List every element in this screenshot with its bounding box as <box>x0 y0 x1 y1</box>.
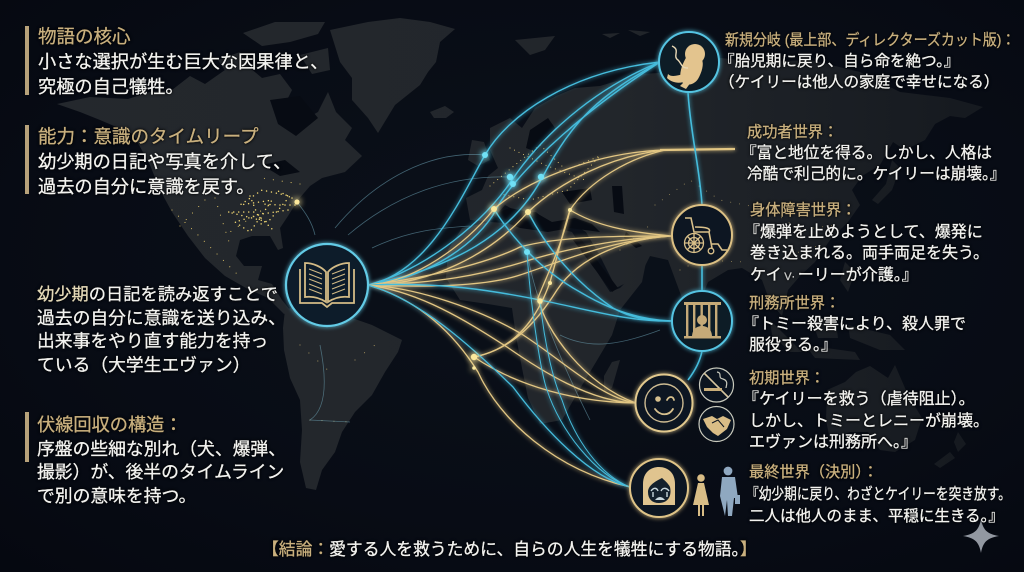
Hudson Bay <box>270 96 318 136</box>
text block: diary explanation: 幼少期の日記を読み返すことで <box>37 284 278 304</box>
UK and Ireland <box>468 140 490 166</box>
icon: fetus <box>659 32 719 92</box>
text block: disability world <box>744 201 989 284</box>
Red Sea <box>573 238 618 292</box>
text block: final world: 『幼少期に戻り、わざとケイリーを突き放す。 <box>746 486 1011 503</box>
text block: success world: 成功者世界： <box>747 124 838 141</box>
text block: diary explanation: ている（大学生エヴァン） <box>37 355 250 375</box>
conclusion: 【結論：愛する人を救うために、自らの人生を犠牲にする物語。】 <box>262 540 757 559</box>
text block: success world: 『富と地位を得る。しかし、人格は <box>741 145 992 162</box>
text block: initial world: 初期世界： <box>749 370 825 387</box>
text block: new branch world: 『胎児期に戻り、自ら命を絶つ。』 <box>719 53 959 70</box>
text block: foreshadowing: 序盤の些細な別れ（犬、爆弾、 <box>37 439 286 459</box>
text block: new branch world <box>719 32 1015 91</box>
text block: disability world: 巻き込まれる。両手両足を失う。 <box>750 245 989 262</box>
New Zealand <box>934 432 966 468</box>
icon: no smoking <box>700 368 734 402</box>
Caspian Sea <box>612 186 624 214</box>
text block: prison world <box>743 294 966 354</box>
Philippines and Taiwan <box>840 262 855 292</box>
Svalbard <box>515 36 555 55</box>
text block: ability: 能力：意識のタイムリープ <box>38 126 259 147</box>
gold lines to wheelchair node <box>368 210 672 357</box>
icon: handshake <box>699 406 734 442</box>
gold lines to success world <box>368 149 735 357</box>
text block: disability world: 『爆弾を止めようとして、爆発に <box>744 224 983 241</box>
icon: man with briefcase figure <box>720 467 740 516</box>
text block: foreshadowing: で別の意味を持つ。 <box>37 486 196 506</box>
central node: open book <box>286 244 368 326</box>
world map <box>57 18 983 490</box>
text block: initial world <box>743 370 989 451</box>
text block: initial world: エヴァンは刑務所へ。』 <box>749 434 917 451</box>
text block: final world: 最終世界（決別）： <box>749 464 878 481</box>
Canadian Arctic islands <box>218 22 330 74</box>
text block: disability world: V· <box>784 271 795 283</box>
text block: prison world: 刑務所世界： <box>749 295 840 312</box>
text block: ability <box>38 126 291 197</box>
text block: final world: 二人は他人のまま、平穏に生きる。』 <box>749 508 1004 525</box>
text block: disability world: ケイ ーリーが介護。』 <box>750 267 918 284</box>
vertical cyan connector between nodes <box>688 92 702 380</box>
Europe lights <box>490 145 600 200</box>
text block: foreshadowing: 撮影）が、後半のタイムライン <box>37 462 284 482</box>
Baltic Sea <box>526 118 555 152</box>
text block: final world <box>746 464 1011 525</box>
Eurasia <box>466 58 983 316</box>
gold lines to smile node <box>368 210 636 403</box>
text block: diary explanation: 出来事をやり直す能力を持っ <box>37 331 268 351</box>
Great Lakes <box>262 160 300 176</box>
Persian Gulf <box>624 232 642 248</box>
Greenland <box>330 18 455 133</box>
text block: foreshadowing: 伏線回収の構造： <box>37 415 183 435</box>
Mediterranean and Black Sea <box>490 188 600 232</box>
Arctic Siberia islands <box>602 30 650 38</box>
North America lights <box>228 190 295 232</box>
text block: story core: 物語の核心 <box>38 26 131 47</box>
bar: ability <box>25 125 28 194</box>
city lights <box>172 145 835 422</box>
text block: foreshadowing <box>37 415 286 506</box>
text block: success world: 冷酷で利己的に。ケイリーは崩壊。』 <box>747 166 1006 183</box>
text block: ability: 幼少期の日記や写真を介して、 <box>38 152 291 172</box>
text block: story core: 小さな選択が生む巨大な因果律と、 <box>38 52 328 72</box>
cyan lines to prison node <box>368 209 672 321</box>
bar: foreshadowing <box>25 412 28 462</box>
Japan <box>872 160 900 204</box>
South America lights <box>300 345 375 422</box>
inland seas <box>262 96 642 292</box>
watermark sparkle <box>963 519 999 553</box>
icon: wheelchair <box>672 205 732 265</box>
text block: new branch world: （ケイリーは他人の家庭で幸せになる） <box>719 74 999 91</box>
icon: woman figure <box>693 474 709 516</box>
text block: disability world: 身体障害世界： <box>750 202 856 219</box>
timeline lines <box>368 62 735 487</box>
text block: prison world: 服役する。』 <box>749 337 837 354</box>
icon: prison bars <box>672 291 732 351</box>
icon: crying face <box>630 459 688 517</box>
text block: prison world: 『トミー殺害により、殺人罪で <box>743 316 966 333</box>
text block: story core <box>38 26 328 97</box>
text block: ability: 過去の自分に意識を戻す。 <box>38 177 254 197</box>
text block: initial world: 『ケイリーを救う（虐待阻止）。 <box>743 391 975 408</box>
Asia lights <box>620 180 835 270</box>
text block: success world <box>741 123 1006 183</box>
Madagascar <box>604 360 620 392</box>
Indonesia <box>770 316 905 360</box>
South America <box>283 303 402 490</box>
text block: initial world: しかし、トミーとレニーが崩壊。 <box>749 413 989 430</box>
North America <box>57 62 362 314</box>
Iceland <box>430 106 454 118</box>
text block: diary explanation: 過去の自分に意識を送り込み、 <box>37 308 286 328</box>
bar: story core <box>25 26 28 95</box>
glowing nodes on lines <box>294 152 572 370</box>
faint connection arcs <box>297 154 660 422</box>
text block: diary explanation <box>37 284 286 375</box>
text block: story core: 究極の自己犠牲。 <box>38 77 184 97</box>
Australia <box>826 365 922 452</box>
Africa <box>446 222 646 424</box>
cyan lines to fetus node <box>368 62 660 285</box>
icon: winking smile <box>636 374 692 432</box>
text block: new branch world: 新規分岐 (最上部、ディレクターズカット版)： <box>725 32 1015 49</box>
lines to crying node <box>368 252 630 487</box>
